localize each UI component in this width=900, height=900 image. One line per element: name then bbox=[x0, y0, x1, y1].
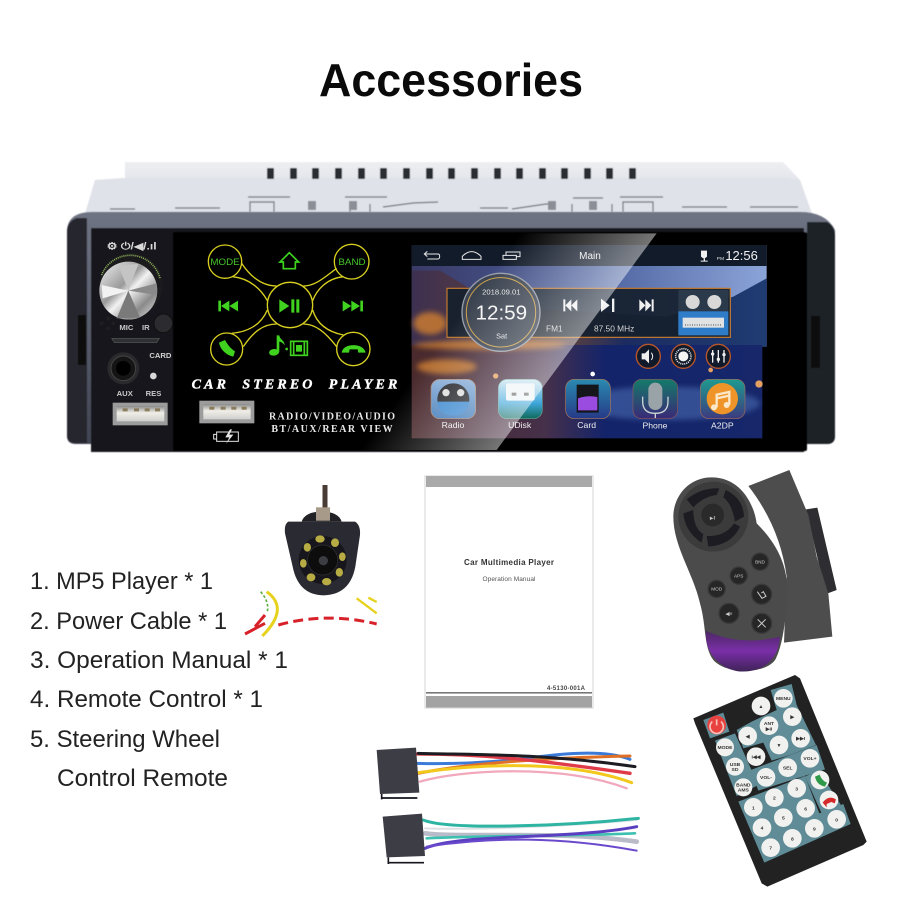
app: A2DP bbox=[700, 379, 745, 430]
mute label: ◀× bbox=[725, 611, 733, 617]
key labels: ANT bbox=[764, 721, 774, 727]
camera body bbox=[285, 522, 360, 595]
item 5 line 2: Control Remote bbox=[57, 765, 228, 792]
key labels: AMS bbox=[738, 788, 750, 794]
app: Radio: Radio bbox=[442, 420, 464, 430]
key labels: USB bbox=[730, 762, 741, 768]
cable bbox=[317, 485, 332, 512]
app: Radio bbox=[431, 379, 476, 430]
teal key panels bbox=[703, 684, 851, 863]
frequency: 87.50 MHz bbox=[594, 323, 634, 333]
app: Card bbox=[566, 379, 610, 430]
radio widget bbox=[447, 288, 730, 337]
manual title: Car Multimedia Player bbox=[464, 558, 554, 567]
hang up icon bbox=[342, 345, 366, 353]
mic status icon bbox=[701, 251, 708, 262]
purple light bbox=[706, 631, 780, 672]
key labels: 4 bbox=[761, 826, 764, 832]
recents icon bbox=[503, 252, 520, 259]
key labels: MODE bbox=[718, 745, 733, 751]
reset dot bbox=[150, 373, 157, 379]
IR remote control bbox=[693, 675, 867, 887]
USB port front bbox=[113, 403, 168, 425]
mount bbox=[302, 512, 342, 522]
key labels: ▲ bbox=[759, 704, 763, 710]
media next bbox=[639, 299, 654, 311]
car stereo unit bbox=[67, 162, 835, 452]
bottom band bbox=[426, 692, 592, 708]
remote body bbox=[673, 477, 787, 671]
manual page bbox=[425, 476, 593, 708]
key labels bbox=[718, 696, 838, 852]
key labels: 5 bbox=[782, 816, 785, 822]
accessories list bbox=[30, 568, 288, 792]
mic holes bbox=[100, 316, 115, 330]
RES label: RES bbox=[146, 389, 161, 398]
key labels: 8 bbox=[791, 836, 794, 842]
key labels: 7 bbox=[769, 846, 772, 852]
app: Card: Card bbox=[577, 420, 596, 430]
key labels: VOL+ bbox=[803, 756, 817, 762]
key labels: MENU bbox=[776, 696, 791, 702]
app: UDisk bbox=[498, 379, 542, 430]
video icon bbox=[291, 341, 307, 355]
steering wheel remote bbox=[673, 470, 837, 672]
remote shell bbox=[693, 675, 867, 887]
call icon bbox=[219, 340, 235, 357]
charge icon bbox=[214, 429, 238, 444]
volume button bbox=[636, 344, 660, 368]
parking guide lines bbox=[245, 592, 377, 636]
control panel: left side bbox=[99, 241, 397, 444]
APS label: APS bbox=[734, 573, 743, 578]
separator dot bbox=[285, 348, 288, 350]
screen title: Main bbox=[579, 251, 601, 262]
day: Sat bbox=[496, 332, 507, 341]
key labels: 3 bbox=[795, 786, 798, 792]
feature text line 2: BT/AUX/REAR VIEW bbox=[271, 424, 393, 435]
feature text line 1: RADIO/VIDEO/AUDIO bbox=[269, 411, 395, 422]
lower wires bbox=[423, 818, 638, 851]
LEDs bbox=[300, 535, 346, 585]
display screen bbox=[360, 233, 767, 450]
key labels: I◀◀ bbox=[751, 754, 761, 760]
item 2: 2. Power Cable * 1 bbox=[30, 608, 227, 635]
aux jack bbox=[107, 352, 139, 384]
clamp strap bbox=[806, 508, 837, 594]
front bezel bbox=[67, 212, 835, 452]
MIC label: MIC bbox=[119, 323, 134, 332]
key labels: 2 bbox=[773, 796, 776, 802]
upper wires bbox=[417, 753, 635, 788]
app: Phone bbox=[633, 379, 678, 430]
MOD label: MOD bbox=[711, 587, 723, 592]
glass reflection bbox=[360, 233, 657, 450]
upper connector bbox=[377, 748, 419, 799]
status icons: ⚙ ⏻/◀/.ıl bbox=[107, 241, 157, 253]
top band bbox=[426, 476, 592, 487]
CARD label: CARD bbox=[149, 351, 172, 360]
next icon bbox=[343, 301, 363, 311]
media prev bbox=[563, 299, 577, 311]
rear view camera bbox=[245, 485, 377, 636]
key labels: ▼ bbox=[777, 743, 781, 749]
manual subtitle: Operation Manual bbox=[482, 576, 536, 583]
item 3: 3. Operation Manual * 1 bbox=[30, 647, 288, 674]
status clock: PM bbox=[717, 256, 724, 262]
USB port panel bbox=[199, 401, 254, 423]
back icon bbox=[424, 251, 440, 259]
MODE button: MODE bbox=[210, 257, 240, 267]
metal plate bbox=[316, 507, 330, 521]
key labels: SD bbox=[732, 767, 739, 773]
status time: 12:56 bbox=[725, 248, 758, 263]
key labels: 1 bbox=[752, 805, 755, 811]
source icon bbox=[757, 592, 766, 598]
wallpaper bbox=[412, 245, 767, 438]
volume knob bbox=[99, 253, 163, 320]
key labels: ▶ bbox=[789, 715, 795, 721]
key labels: SEL bbox=[783, 765, 793, 771]
touch button lines bbox=[208, 244, 370, 366]
item 5 line 1: 5. Steering Wheel bbox=[30, 726, 220, 753]
power cable bbox=[377, 748, 638, 864]
home icon bbox=[280, 253, 299, 269]
key labels: BAND bbox=[736, 783, 751, 789]
metal chassis top bbox=[85, 162, 812, 214]
BAND button: BAND bbox=[338, 257, 366, 267]
lens bbox=[308, 545, 338, 575]
item 1: 1. MP5 Player * 1 bbox=[30, 568, 213, 595]
play pause icon bbox=[279, 299, 299, 313]
buttons bbox=[708, 553, 772, 633]
key labels: ◀ bbox=[745, 734, 750, 740]
clamp bracket bbox=[748, 470, 832, 643]
call key icon bbox=[815, 775, 827, 787]
CAR STEREO PLAYER: CAR STEREO PLAYER bbox=[192, 377, 397, 392]
power key bbox=[707, 716, 726, 734]
band label: FM1 bbox=[546, 323, 563, 333]
title: Accessories bbox=[319, 54, 583, 106]
app: UDisk: UDisk bbox=[508, 420, 532, 430]
previous icon bbox=[218, 301, 238, 311]
hang up key icon bbox=[823, 798, 836, 807]
key labels: VOL- bbox=[760, 775, 772, 781]
key labels: ▶II bbox=[765, 727, 773, 733]
app: A2DP: A2DP bbox=[711, 420, 734, 430]
dpad label: ▶‖ bbox=[710, 515, 715, 520]
manual code: 4-5130-001A bbox=[547, 686, 586, 692]
clock dial bbox=[462, 273, 540, 351]
equalizer button bbox=[706, 344, 730, 368]
key labels: 0 bbox=[835, 817, 838, 823]
IR label: IR bbox=[142, 323, 150, 332]
media play bbox=[601, 299, 614, 312]
operation manual bbox=[425, 476, 593, 708]
app: Phone: Phone bbox=[642, 420, 668, 430]
card slot bbox=[112, 338, 159, 343]
BND label: BND bbox=[755, 559, 766, 564]
music note bbox=[269, 335, 285, 356]
status bar bbox=[412, 245, 767, 266]
brightness button bbox=[671, 344, 695, 368]
IR sensor bbox=[154, 314, 173, 333]
AUX label: AUX bbox=[117, 389, 134, 398]
d-pad bbox=[678, 482, 748, 552]
lens ring bbox=[299, 536, 347, 584]
home softkey bbox=[462, 252, 481, 259]
key labels: 9 bbox=[813, 826, 816, 832]
date: 2018.09.01 bbox=[482, 287, 520, 296]
key labels: ▶▶I bbox=[795, 736, 806, 742]
hang icon bbox=[758, 619, 766, 627]
time: 12:59 bbox=[475, 302, 527, 325]
lower connector bbox=[383, 814, 425, 864]
key labels: 6 bbox=[804, 806, 807, 812]
item 4: 4. Remote Control * 1 bbox=[30, 686, 263, 713]
white keys bbox=[716, 689, 846, 857]
radio icon bbox=[678, 290, 728, 335]
